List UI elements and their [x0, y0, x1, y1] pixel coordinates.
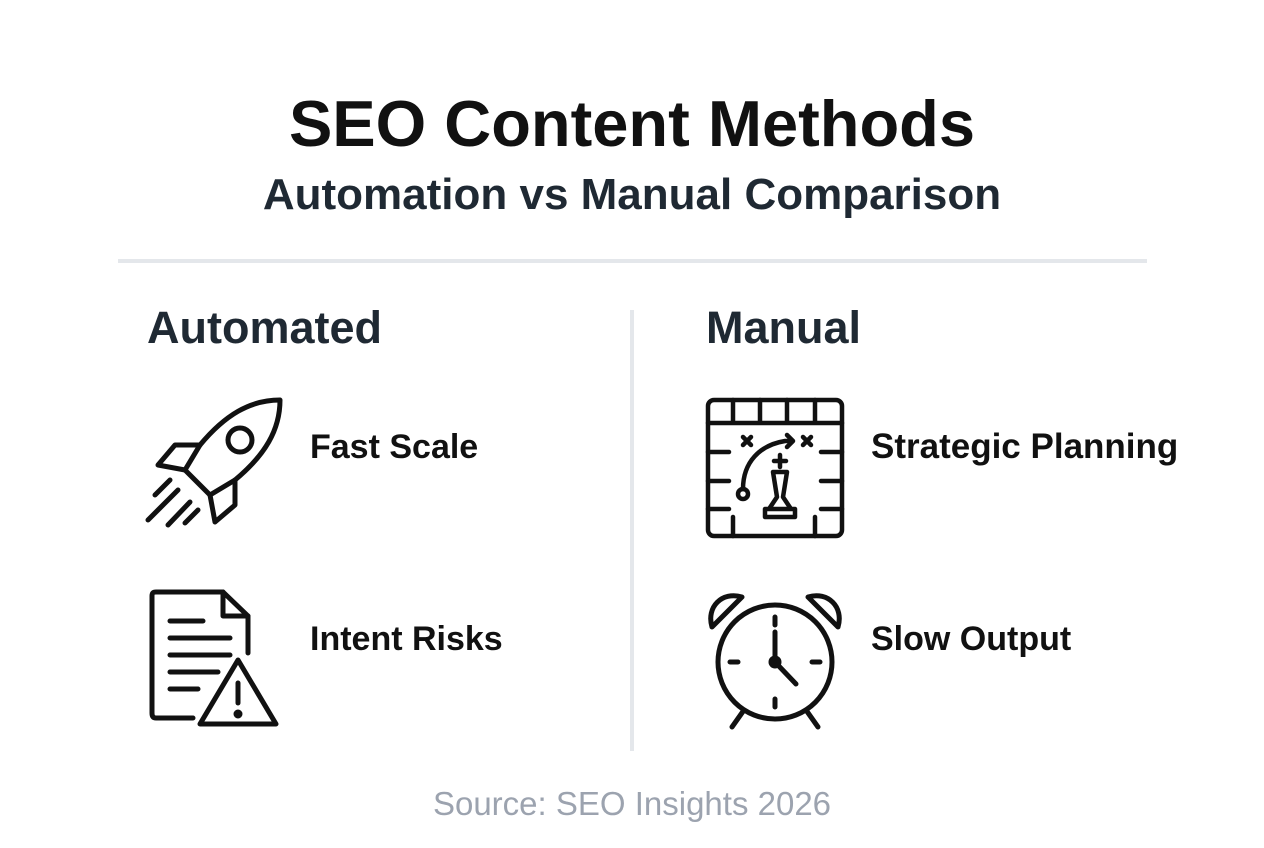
- title: SEO Content Methods: [289, 87, 975, 160]
- label: Strategic Planning: Strategic Planning: [871, 427, 1178, 466]
- label: Fast Scale: Fast Scale: [310, 428, 478, 466]
- source note: Source: SEO Insights 2026: [433, 785, 831, 822]
- label: Intent Risks: Intent Risks: [310, 620, 503, 658]
- icon: chess strategy board: [706, 398, 844, 538]
- heading: Manual: Manual: [706, 302, 861, 353]
- icon: rocket: [146, 398, 282, 528]
- heading: Automated: Automated: [147, 302, 382, 353]
- label: Slow Output: Slow Output: [871, 620, 1071, 658]
- subtitle: Automation vs Manual Comparison: [263, 170, 1001, 219]
- icon: document warning: [150, 590, 278, 726]
- icon: alarm clock: [708, 593, 842, 730]
